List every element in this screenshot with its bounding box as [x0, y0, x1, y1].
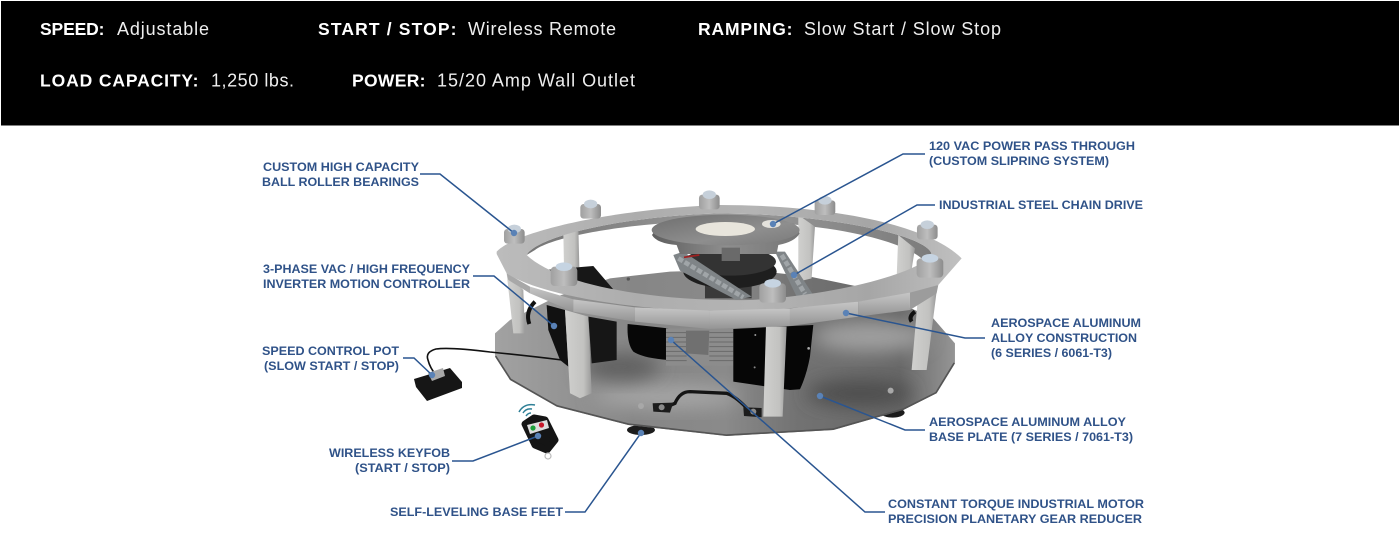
- spec: power: POWER:: [352, 70, 426, 90]
- spec: speed: Adjustable: [117, 19, 209, 39]
- label: motor: CONSTANT TORQUE INDUSTRIAL MOTOR: [888, 497, 1144, 511]
- label: power pass through: (CUSTOM SLIPRING SYSTEM): [929, 154, 1109, 168]
- label: motion controller: 3-PHASE VAC / HIGH FREQUENCY: [263, 262, 470, 276]
- leader: aluminum construction: [843, 310, 985, 338]
- spec: ramping: RAMPING:: [698, 19, 792, 39]
- label: speed control pot: SPEED CONTROL POT: [262, 344, 400, 358]
- spec: power: 15/20 Amp Wall Outlet: [437, 70, 635, 90]
- base plate: [495, 269, 955, 436]
- ring inner back face: [527, 213, 932, 260]
- leader: base feet: [565, 430, 644, 512]
- label: base plate: AEROSPACE ALUMINUM ALLOY: [929, 415, 1126, 429]
- label: aluminum construction: [991, 316, 1141, 360]
- leader: power pass through: [770, 154, 925, 227]
- spec: speed: SPEED:: [40, 19, 104, 39]
- label: base plate: [929, 415, 1133, 444]
- label: motion controller: INVERTER MOTION CONTROLLER: [263, 277, 470, 291]
- spec: start / stop: Wireless Remote: [468, 19, 616, 39]
- illustration: rotating platform assembly: [495, 190, 962, 436]
- leader: chain drive: [791, 205, 935, 278]
- right chain: [775, 252, 813, 297]
- icon: wireless keyfob: [519, 405, 555, 459]
- back posts: [507, 215, 915, 333]
- spec: ramping: [698, 19, 1001, 39]
- leader: speed pot: [403, 358, 435, 378]
- handle bracket: [653, 392, 762, 417]
- label: aluminum construction: AEROSPACE ALUMINUM: [991, 316, 1141, 330]
- base feet: [627, 408, 905, 435]
- front posts: [565, 292, 937, 417]
- label: ball roller bearings: BALL ROLLER BEARINGS: [262, 175, 419, 189]
- spec: load capacity: 1,250 lbs.: [211, 70, 294, 90]
- panel: specification header bar: [1, 1, 1399, 126]
- leader: base plate: [817, 393, 925, 430]
- spec: ramping: Slow Start / Slow Stop: [804, 19, 1001, 39]
- label: base plate: BASE PLATE (7 SERIES / 7061-T3): [929, 430, 1133, 444]
- spec: load capacity: LOAD CAPACITY:: [40, 70, 198, 90]
- label: wireless keyfob: WIRELESS KEYFOB: [329, 446, 450, 460]
- label: aluminum construction: ALLOY CONSTRUCTION: [991, 331, 1137, 345]
- label: power pass through: 120 VAC POWER PASS THROUGH: [929, 139, 1135, 153]
- leader: motion controller: [473, 276, 557, 329]
- motor and gear reducer: [628, 324, 813, 390]
- left chain: [673, 252, 752, 300]
- label: base feet: SELF-LEVELING BASE FEET: [390, 505, 564, 519]
- spec: speed: [40, 19, 209, 39]
- central hub with chain drive: [652, 215, 813, 300]
- inverter motion controller: [528, 266, 915, 367]
- spec: load capacity: [40, 70, 294, 90]
- label: wireless keyfob: (START / STOP): [355, 461, 450, 475]
- label: motion controller: [263, 262, 470, 291]
- spec: start / stop: START / STOP:: [318, 19, 456, 39]
- label: ball roller bearings: [262, 160, 419, 189]
- bearing caps: [504, 190, 943, 303]
- leader: ball roller bearings: [420, 174, 517, 236]
- label: speed control pot: (SLOW START / STOP): [264, 359, 399, 373]
- label: motor: [888, 497, 1144, 526]
- support ring: [497, 205, 962, 329]
- label: power pass through: [929, 139, 1135, 168]
- spec: power: [352, 70, 635, 90]
- label: aluminum construction: (6 SERIES / 6061-T3): [991, 346, 1112, 360]
- label: chain drive: INDUSTRIAL STEEL CHAIN DRIVE: [939, 198, 1143, 212]
- slip ring: [762, 220, 781, 228]
- turntable centre disc: [696, 222, 755, 236]
- leader: motor: [668, 337, 885, 512]
- spec: start / stop: [318, 19, 616, 39]
- icon: speed control pot: [414, 348, 562, 401]
- label: ball roller bearings: CUSTOM HIGH CAPACITY: [263, 160, 419, 174]
- label: speed control pot: [262, 344, 400, 373]
- label: wireless keyfob: [329, 446, 450, 475]
- label: motor: PRECISION PLANETARY GEAR REDUCER: [888, 512, 1142, 526]
- leader: keyfob: [452, 433, 541, 461]
